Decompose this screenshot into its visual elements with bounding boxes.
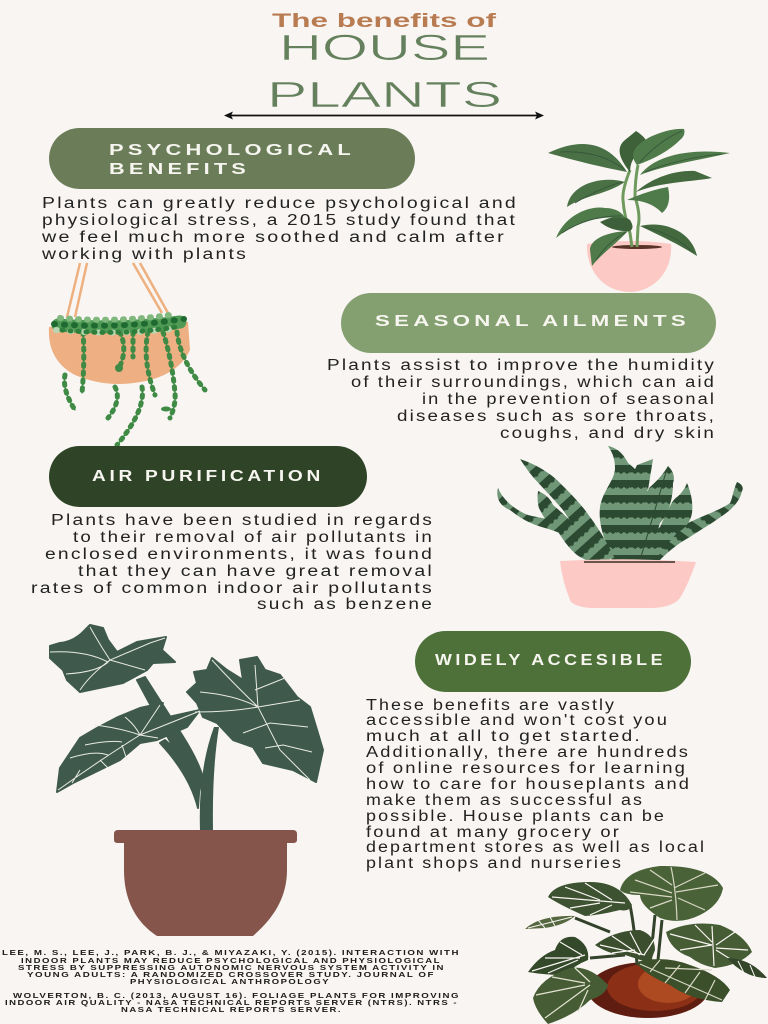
body text: Plants assist to improve the humidity: [327, 357, 716, 374]
title word: house: HOUSE: [279, 27, 490, 68]
references: WOLVERTON, B. C. (2013, AUGUST 16). FOLIAGE PLANTS FOR IMPROVING: [13, 991, 460, 1000]
body text: physiological stress, a 2015 study found that: [42, 212, 517, 229]
body text: found at many grocery or: [366, 824, 621, 841]
body text: [41, 195, 518, 263]
body text: department stores as well as local: [366, 839, 706, 856]
body text: in the prevention of seasonal: [422, 391, 716, 408]
references: YOUNG ADULTS: A RANDOMIZED CROSSOVER STUDY. JOURNAL OF: [27, 970, 435, 979]
heading pill: WIDELY ACCESIBLE: [435, 652, 666, 669]
heading pill: [49, 446, 367, 507]
body text: [366, 697, 706, 872]
body text: diseases such as sore throats,: [397, 408, 716, 425]
body text: possible. House plants can be: [366, 808, 666, 825]
heading pill: BENEFITS: [109, 161, 250, 178]
icon: alocasia plant in brown pot: [50, 625, 323, 936]
body text: Plants have been studied in regards: [51, 512, 434, 529]
body text: that they can have great removal: [78, 563, 434, 580]
panel: seasonal ailments: [327, 293, 716, 442]
body text: such as benzene: [257, 596, 434, 613]
body text: Additionally, there are hundreds: [366, 744, 690, 761]
references: INDOOR PLANTS MAY REDUCE PSYCHOLOGICAL AND PHYSIOLOGICAL: [21, 956, 441, 965]
references: [2, 948, 460, 1014]
heading pill: [415, 631, 691, 692]
heading pill: [49, 128, 415, 189]
body text: enclosed environments, it was found: [45, 546, 434, 563]
panel: air purification: [31, 446, 434, 613]
body text: much at all to get started.: [366, 728, 642, 745]
heading pill: AIR PURIFICATION: [92, 468, 324, 485]
body text: coughs, and dry skin: [500, 425, 716, 442]
body text: make them as successful as: [366, 792, 644, 809]
references: INDOOR AIR QUALITY - NASA TECHNICAL REPORTS SERVER (NTRS). NTRS -: [5, 998, 458, 1007]
icon: rubber plant in pink pot: [548, 129, 730, 292]
body text: [31, 512, 434, 613]
title kicker: The benefits of: [272, 11, 497, 32]
body text: how to care for houseplants and: [366, 776, 691, 793]
icon: monstera in terracotta bowl: [525, 866, 767, 1024]
body text: accessible and won't cost you: [366, 712, 669, 729]
heading pill: PSYCHOLOGICAL: [109, 142, 355, 159]
body text: to their removal of air pollutants in: [73, 529, 434, 546]
body text: These benefits are vastly: [366, 697, 616, 714]
body text: Plants can greatly reduce psychological and: [42, 195, 518, 212]
body text: plant shops and nurseries: [366, 855, 623, 872]
icon: snake plant in pink pot: [497, 446, 743, 608]
body text: of their surroundings, which can aid: [351, 374, 716, 391]
heading pill: SEASONAL AILMENTS: [375, 313, 690, 330]
references: LEE, M. S., LEE, J., PARK, B. J., & MIYAZAKI, Y. (2015). INTERACTION WITH: [2, 948, 460, 957]
body text: of online resources for learning: [366, 760, 687, 777]
double-headed arrow: [224, 112, 544, 120]
heading pill: [341, 293, 716, 353]
brown pot: [114, 830, 297, 936]
body text: [327, 357, 716, 442]
references: NASA TECHNICAL REPORTS SERVER.: [121, 1005, 342, 1014]
panel: widely accessible: [366, 631, 706, 872]
panel: psychological benefits: [41, 128, 518, 263]
title word: plants: PLANTS: [267, 74, 502, 115]
title: [267, 11, 502, 115]
references: STRESS BY SUPPRESSING AUTONOMIC NERVOUS SYSTEM ACTIVITY IN: [18, 963, 445, 972]
body text: rates of common indoor air pollutants: [31, 580, 434, 597]
body text: working with plants: [41, 246, 248, 263]
references: PHYSIOLOGICAL ANTHROPOLOGY: [130, 977, 330, 986]
icon: hanging string-of-pearls plant: [49, 263, 205, 445]
body text: we feel much more soothed and calm after: [41, 229, 506, 246]
